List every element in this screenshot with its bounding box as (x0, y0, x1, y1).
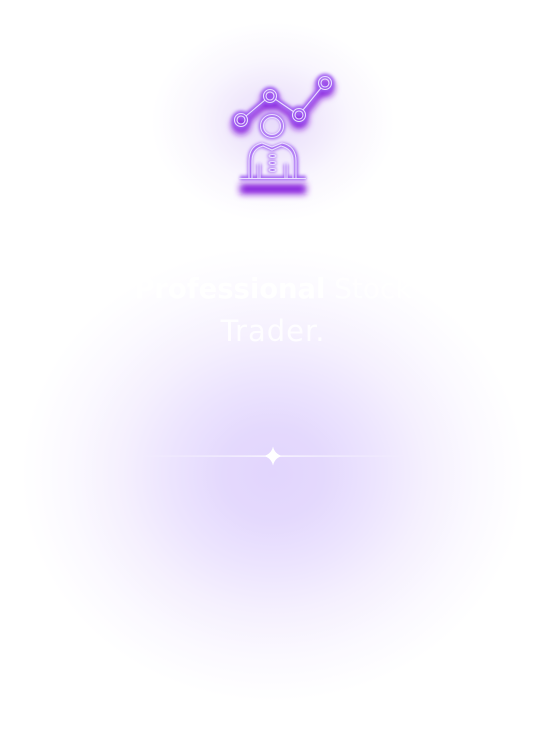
background purple glow (0, 250, 546, 720)
icon shadow (235, 82, 331, 189)
icon halo (130, 10, 420, 240)
heading line: Professional Stock: Professional Stock (134, 272, 412, 305)
divider with star (180, 447, 366, 465)
heading line: Trader: Trader. (221, 314, 325, 348)
heading block (134, 233, 412, 348)
heading small line: Be a Full (226, 233, 320, 258)
icon glow (234, 76, 332, 178)
icon line art (234, 76, 332, 178)
